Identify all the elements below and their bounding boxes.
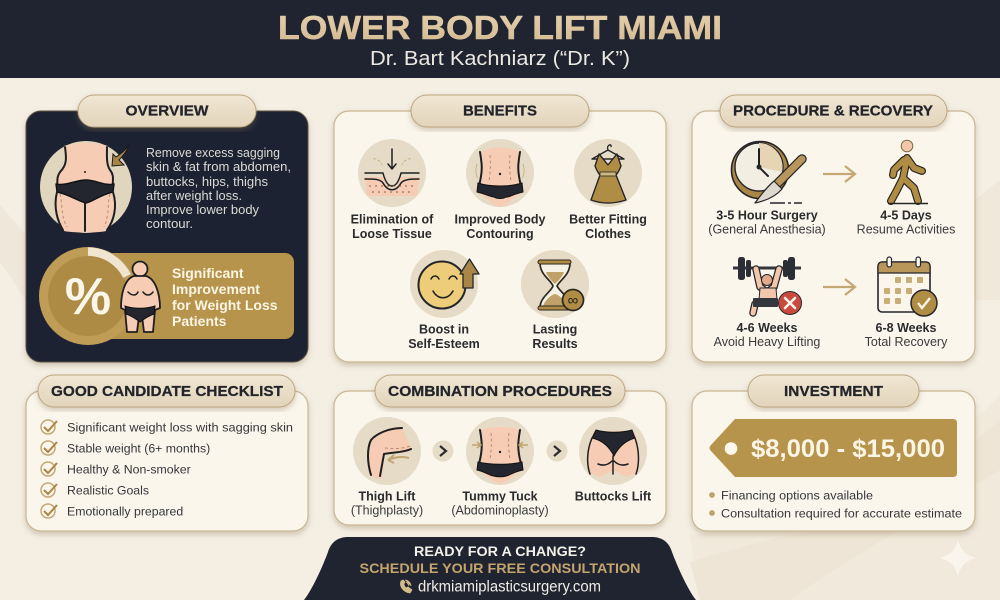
icon: clock and scalpel [732, 142, 802, 203]
text: benefit labels row one: Clothes [585, 227, 631, 241]
text: total recovery: Total Recovery [865, 335, 948, 349]
text: overview description: Improve lower body [146, 203, 260, 217]
price tag: $8,000 - $15,000 [751, 435, 945, 463]
heading: investment [748, 375, 919, 407]
list: investment notes [709, 488, 962, 520]
text: resume activities [857, 208, 955, 236]
text: benefit labels row one [351, 212, 647, 241]
icon: sparkle [940, 540, 976, 576]
list: checklist items [41, 420, 293, 518]
icon: chevron two [546, 440, 568, 462]
icon: hourglass with infinity: ∞ [568, 292, 579, 309]
arrow: surgery to activities [823, 166, 855, 182]
heading: overview [78, 95, 256, 127]
heading: overview: OVERVIEW [126, 102, 209, 120]
text: surgery: (General Anesthesia) [708, 222, 826, 236]
panel: benefits [334, 95, 666, 362]
callout: significant improvement [39, 247, 294, 345]
text: avoid heavy lifting: 4-6 Weeks [737, 321, 798, 335]
text: procedure labels [351, 490, 652, 518]
text: benefit labels row one: Improved Body [454, 212, 546, 226]
call to action: drkmiamiplasticsurgery.com [418, 578, 601, 596]
icon: chevron one [432, 440, 454, 462]
icon: loose tissue [358, 139, 426, 207]
icon: person before weight loss [121, 262, 160, 332]
icon: phone [400, 580, 412, 593]
text: resume activities: 4-5 Days [880, 208, 932, 222]
text: benefit labels row two [408, 322, 578, 351]
text: improvement label: for Weight Loss [172, 297, 278, 313]
text: procedure labels: Tummy Tuck [462, 490, 538, 504]
text: total recovery: 6-8 Weeks [876, 321, 937, 335]
text: avoid heavy lifting [714, 321, 820, 349]
list: investment notes: Financing options available [721, 488, 873, 502]
text: surgery: 3-5 Hour Surgery [716, 208, 818, 222]
heading: benefits [411, 95, 589, 127]
panel: combination procedures [334, 375, 666, 525]
subtitle: Dr. Bart Kachniarz (“Dr. K”) [370, 48, 630, 70]
icon: lower body with arrow [40, 141, 132, 233]
text: improvement label: Patients [172, 313, 227, 329]
heading: combination procedures [375, 375, 625, 407]
text: improvement label [172, 265, 278, 329]
panel: investment [692, 375, 975, 531]
text: overview description: contour. [146, 217, 193, 231]
text: benefit labels row one: Elimination of [351, 212, 434, 226]
text: avoid heavy lifting: Avoid Heavy Lifting [714, 335, 820, 349]
icon: walking person [888, 140, 928, 204]
text: procedure labels: (Thighplasty) [351, 504, 423, 518]
panel: overview [26, 95, 976, 600]
call to action: READY FOR A CHANGE? [414, 544, 586, 559]
heading: good candidate checklist [38, 375, 295, 407]
icon: dress on hanger [574, 139, 642, 207]
text: procedure labels: (Abdominoplasty) [451, 504, 549, 518]
list: checklist items: Emotionally prepared [67, 504, 183, 518]
text: overview description [146, 146, 291, 231]
icon: hourglass with infinity [521, 250, 589, 318]
panel: good candidate checklist [26, 375, 308, 531]
text: improvement label: Improvement [172, 281, 260, 297]
text: procedure labels: Thigh Lift [359, 490, 416, 504]
list: checklist items: Stable weight (6+ months) [67, 442, 210, 456]
header band [0, 0, 1000, 78]
text: benefit labels row two: Boost in [419, 322, 469, 336]
panel: procedure and recovery [692, 95, 975, 362]
icon: tummy tuck [466, 417, 534, 485]
call to action: SCHEDULE YOUR FREE CONSULTATION [360, 561, 640, 576]
text: surgery [708, 208, 826, 236]
heading: investment: INVESTMENT [784, 383, 883, 400]
heading: combination procedures: COMBINATION PROCEDURES [388, 383, 612, 400]
list: investment notes: Consultation required for accurate estimate [721, 506, 962, 520]
list: checklist items: Healthy & Non-smoker [67, 462, 191, 476]
icon: smile with up arrow [410, 250, 479, 318]
heading: procedure and recovery [720, 95, 947, 127]
text: benefit labels row one: Loose Tissue [352, 227, 432, 241]
heading: benefits: BENEFITS [463, 102, 537, 120]
text: benefit labels row two: Results [532, 337, 578, 351]
price tag [710, 419, 957, 477]
text: overview description: skin & fat from abdomen, [146, 160, 291, 174]
title: LOWER BODY LIFT MIAMI [278, 9, 722, 46]
text: benefit labels row one: Better Fitting [569, 212, 647, 226]
text: resume activities: Resume Activities [857, 222, 955, 236]
text: overview description: Remove excess sagging [146, 146, 280, 160]
icon: buttocks lift [579, 417, 647, 485]
icon: calendar with check [878, 257, 937, 316]
text: benefit labels row two: Lasting [533, 322, 577, 336]
heading: good candidate checklist: GOOD CANDIDATE CHECKLIST [51, 383, 283, 400]
text: procedure labels: Buttocks Lift [575, 490, 652, 504]
icon: percent sign: % [65, 268, 111, 326]
icon: body contouring [466, 139, 534, 207]
text: benefit labels row two: Self-Esteem [408, 337, 480, 351]
text: overview description: buttocks, hips, thighs [146, 175, 268, 189]
text: total recovery [865, 321, 948, 349]
call to action [304, 537, 696, 600]
text: improvement label: Significant [172, 265, 244, 281]
heading: procedure and recovery: PROCEDURE & RECOVERY [733, 102, 933, 120]
list: checklist items: Significant weight loss with sagging skin [67, 420, 293, 434]
text: overview description: after weight loss. [146, 189, 242, 203]
icon: lifter with prohibited mark [733, 257, 802, 314]
list: checklist items: Realistic Goals [67, 484, 149, 498]
icon: thigh lift [353, 417, 421, 485]
text: benefit labels row one: Contouring [466, 227, 534, 241]
arrow: lifting to recovery [823, 279, 855, 295]
